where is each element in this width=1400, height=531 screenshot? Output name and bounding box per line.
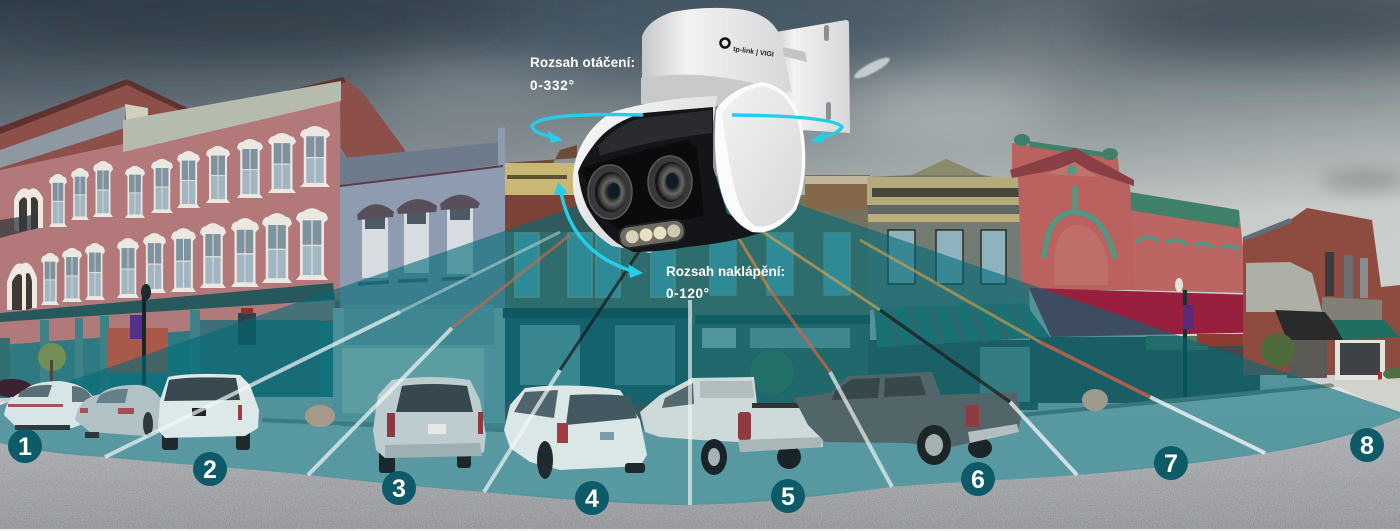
green awning — [1332, 320, 1400, 340]
building: blue-grey shopfront — [333, 127, 505, 430]
upper row of windows — [49, 126, 330, 227]
badge 4: 4 — [585, 485, 599, 513]
black face — [578, 107, 760, 252]
car 3: white SUV — [158, 374, 259, 450]
teal storefront with dentil cornice — [0, 283, 335, 400]
right lens — [648, 156, 692, 208]
camera product image — [573, 8, 850, 253]
sidewalk and parking lot — [0, 378, 1400, 505]
badge 7: 7 — [1164, 450, 1178, 478]
street lamp and banner, left — [130, 284, 256, 385]
car 4: silver SUV — [373, 377, 486, 473]
white housing — [573, 96, 717, 253]
label: rotation range: 0-332° — [530, 78, 574, 93]
badge 3 — [382, 471, 416, 505]
side disc — [715, 82, 805, 233]
road surface — [0, 418, 1400, 531]
badge 7 — [1154, 446, 1188, 480]
building: olive-grey shop with ornate cornice — [867, 159, 1050, 410]
building: far-right brick and stone shops — [1243, 208, 1400, 382]
car 2: grey sedan — [75, 385, 163, 438]
street lamp and banner, right — [1175, 278, 1194, 398]
windows with arched hoods — [357, 195, 480, 284]
pediment — [1010, 148, 1134, 186]
label: rotation range — [530, 55, 635, 93]
mount cylinder — [642, 8, 792, 92]
bracket slots — [783, 25, 831, 120]
roof domes — [1014, 134, 1118, 160]
building: red pediment building — [1010, 134, 1277, 403]
camera field of view overlay — [0, 167, 1400, 505]
badge 1: 1 — [18, 433, 32, 461]
logo on mount — [720, 38, 774, 59]
badge 3: 3 — [392, 475, 406, 503]
badge 6: 6 — [971, 466, 985, 494]
badge 5 — [771, 479, 805, 513]
arrow: tilt — [554, 182, 643, 278]
wall bracket — [770, 20, 850, 133]
red awning — [1029, 288, 1277, 337]
badge 2 — [193, 452, 227, 486]
number badges — [8, 428, 1384, 515]
car 6: silver pickup — [640, 377, 823, 475]
lower row of windows — [41, 208, 328, 305]
arrow: rotation, right — [732, 115, 842, 143]
badge 6 — [961, 462, 995, 496]
striped green awning — [874, 303, 1050, 347]
car 5: white minivan — [504, 385, 647, 479]
badge 8: 8 — [1360, 432, 1374, 460]
teal framed windows — [710, 233, 850, 295]
arrow: rotation, left — [532, 114, 643, 143]
badge 4 — [575, 481, 609, 515]
building: central brown shop — [690, 175, 870, 430]
logo on mount: tp-link | VIGI — [733, 46, 774, 59]
left lens — [588, 165, 632, 219]
label: rotation range: Rozsah otáčení: — [530, 55, 635, 70]
building: large pink three-storey block — [0, 77, 405, 400]
badge 5: 5 — [781, 483, 795, 511]
dark awning — [1275, 310, 1346, 340]
badge 8 — [1350, 428, 1384, 462]
badge 2: 2 — [203, 456, 217, 484]
label: tilt range: 0-120° — [666, 286, 709, 301]
label: tilt range — [666, 264, 785, 301]
label: tilt range: Rozsah naklápění: — [666, 264, 785, 279]
teal framed windows — [515, 233, 675, 297]
building: brick shop with yellow cornice — [503, 145, 690, 430]
sector dividing lines — [105, 220, 1265, 505]
small green window hoods — [1136, 238, 1239, 250]
arched windows and fire escape — [0, 188, 43, 310]
planters on the sidewalk — [305, 389, 1108, 427]
car 1: white sedan — [0, 379, 96, 430]
upper windows — [888, 230, 1006, 284]
parked cars — [0, 372, 1108, 479]
green arch ornament — [1044, 186, 1115, 258]
badge 1 — [8, 429, 42, 463]
car 7: grey-green pickup — [794, 372, 1021, 465]
LED light bar — [618, 219, 686, 249]
